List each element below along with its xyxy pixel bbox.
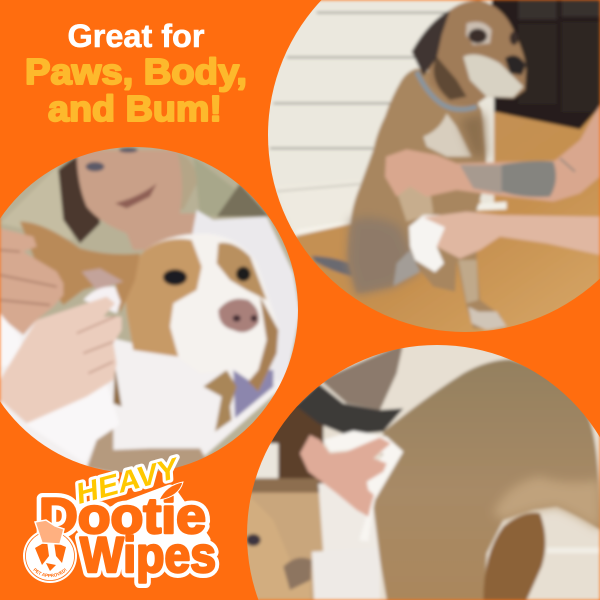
heading line: Great for: Great for [68,18,204,54]
blurred olive background [0,147,298,458]
dog tail [312,256,353,277]
white steps [312,483,600,600]
far hand [0,228,63,335]
dog inner leg [483,513,545,600]
woman with blurred face [58,147,207,250]
dog body [373,359,600,600]
lower arm and hand [423,212,600,259]
logo white backing: Wipes [80,527,216,583]
wipe [323,431,403,542]
hand [300,435,391,517]
dog head [412,0,526,107]
wood floor [296,109,600,332]
white cotton pad [83,286,121,313]
photo circle: dog paw being wiped [260,0,600,340]
person's arm behind dog [320,343,403,410]
purple clothing [233,370,273,418]
badge text: PET APPROVED! [33,568,67,578]
brown fur by chest [87,367,237,480]
heading line: and Bum!: and Bum! [48,88,222,129]
white underlay [0,321,280,472]
lifted dog ear [20,222,140,313]
logo white backing [39,488,216,583]
dog body [347,68,507,330]
wooden furniture [252,404,326,496]
logo word: Dootie: Dootie [39,488,206,544]
white post [473,95,507,211]
icon: leaf [159,482,183,500]
dog head [123,233,278,392]
photo circle: dog rear being wiped [240,340,600,600]
photo circle: beagle ear being cleaned [0,140,310,480]
blond dog in corner [247,501,313,596]
logo: Heavy Dootie Wipes [23,452,220,588]
wipe [409,215,453,272]
badge dogs [35,520,64,544]
badge: pet approved [23,519,77,583]
lighter fur on thigh [493,477,600,530]
white sleeve [0,312,114,439]
logo white backing: Dootie [39,488,206,544]
inner ear [82,268,123,290]
beige wall [298,345,600,600]
wall panels [268,0,495,239]
dark dog tail [295,383,403,435]
white shirt [190,208,298,384]
near hand [0,297,122,423]
logo word: Wipes: Wipes [80,527,216,583]
upper arm with tattoo [385,105,600,202]
wooden floor [240,493,323,600]
title [25,18,247,129]
logo word: HEAVY: HEAVY [73,452,184,511]
kitchen cabinets [492,0,600,130]
dog collar [417,72,477,109]
heading line: Paws, Body,: Paws, Body, [25,51,247,92]
